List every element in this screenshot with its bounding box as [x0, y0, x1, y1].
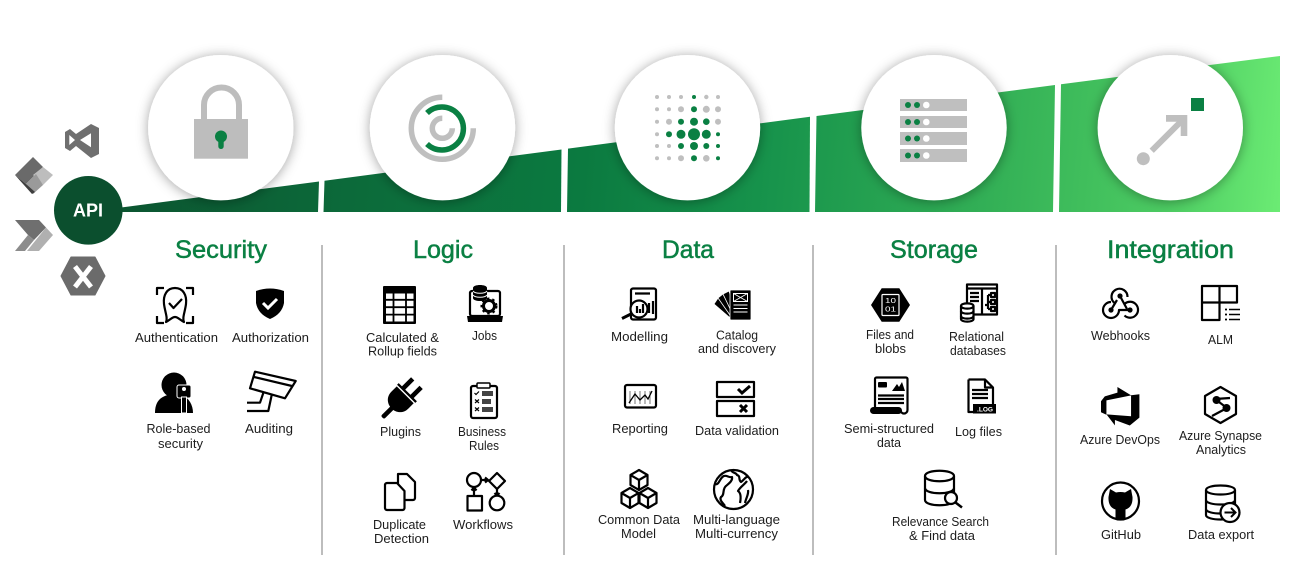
item: role-based security: security: [158, 436, 203, 451]
item: workflows: Workflows: [453, 517, 513, 532]
panel: storage: [844, 236, 1006, 543]
item: common data model: Model: [621, 526, 656, 541]
item: relational databases: [949, 284, 1006, 358]
item: files and blobs: 01: [885, 304, 896, 314]
item: business rules: Business: [458, 424, 506, 439]
item: auditing: [245, 372, 296, 436]
circle: data dots: [615, 55, 760, 200]
heading: logic: Logic: [413, 236, 473, 264]
item: duplicate detection: Detection: [374, 531, 429, 546]
item: relational databases: databases: [950, 343, 1006, 358]
item: azure synapse analytics: Azure Synapse: [1179, 428, 1262, 443]
item: auditing: Auditing: [245, 421, 293, 436]
item: calculated and rollup fields: [366, 286, 439, 358]
item: data export: [1188, 486, 1254, 542]
icon: Visual Studio: [65, 124, 99, 158]
icon: Xamarin: [61, 257, 105, 295]
icon: Power Apps: [15, 157, 53, 194]
item: role-based security: Role-based: [146, 421, 210, 436]
item: plugins: Plugins: [380, 424, 421, 439]
item: multi-language multi-currency: Multi-language: [693, 512, 780, 527]
item: azure devops: [1080, 387, 1160, 447]
heading: integration: Integration: [1107, 236, 1234, 264]
item: relevance search and find data: & Find data: [909, 528, 976, 543]
circle: security lock: [148, 55, 294, 200]
item: azure synapse analytics: Analytics: [1196, 442, 1246, 457]
item: ALM: [1202, 286, 1240, 347]
item: webhooks: [1091, 289, 1150, 343]
item: workflows: [453, 473, 513, 532]
item: github: [1101, 482, 1141, 542]
item: github: GitHub: [1101, 527, 1141, 542]
item: webhooks: Webhooks: [1091, 328, 1150, 343]
item: authentication: [135, 288, 218, 345]
item: business rules: [458, 383, 506, 453]
circle: integration arrow: [1098, 55, 1243, 200]
item: azure synapse analytics: [1179, 387, 1262, 457]
heading: storage: Storage: [890, 236, 978, 264]
growth wedge: [118, 56, 1280, 212]
item: jobs: Jobs: [472, 328, 497, 343]
item: data validation: Data validation: [695, 423, 779, 438]
item: data validation: [695, 382, 779, 438]
item: calculated and rollup fields: Rollup fields: [368, 344, 437, 358]
item: business rules: Rules: [469, 438, 499, 453]
item: common data model: [598, 470, 681, 541]
panel: integration: [1080, 236, 1262, 542]
item: multi-language multi-currency: [693, 470, 780, 541]
item: semi-structured data: [844, 378, 934, 450]
panel: data: [598, 236, 780, 541]
item: files and blobs: 10: [885, 296, 896, 305]
panel: logic: [366, 236, 513, 546]
item: relational databases: Relational: [949, 329, 1004, 344]
panel: security: [135, 236, 309, 451]
item: reporting: [612, 385, 668, 436]
item: catalog and discovery: Catalog: [716, 328, 758, 342]
icon: Power Automate: [15, 220, 53, 251]
item: files and blobs: [866, 288, 914, 356]
item: modelling: [611, 288, 668, 344]
item: ALM: ALM: [1208, 332, 1233, 347]
item: duplicate detection: [373, 474, 429, 546]
item: authentication: Authentication: [135, 330, 218, 345]
item: calculated and rollup fields: Calculated &: [366, 330, 439, 345]
API hub: API: [73, 200, 103, 220]
API hub: [54, 176, 123, 245]
item: multi-language multi-currency: Multi-currency: [695, 526, 779, 541]
item: azure devops: Azure DevOps: [1080, 432, 1160, 447]
heading: security: Security: [175, 236, 268, 264]
circle: storage servers: [861, 55, 1007, 200]
item: log files: .LOG: [977, 406, 993, 414]
item: semi-structured data: Semi-structured: [844, 421, 934, 436]
item: common data model: Common Data: [598, 512, 681, 527]
item: files and blobs: Files and: [866, 327, 914, 342]
item: files and blobs: blobs: [875, 341, 906, 356]
item: role-based security: [146, 372, 210, 451]
item: relevance search and find data: [892, 471, 989, 543]
item: modelling: Modelling: [611, 329, 668, 344]
item: duplicate detection: Duplicate: [373, 517, 426, 532]
item: authorization: [232, 288, 309, 345]
item: plugins: [373, 374, 426, 439]
item: relevance search and find data: Relevance Search: [892, 514, 989, 529]
item: log files: [955, 380, 1002, 439]
item: reporting: Reporting: [612, 421, 668, 436]
item: catalog and discovery: [698, 290, 776, 356]
heading: data: Data: [662, 236, 714, 264]
item: data export: Data export: [1188, 527, 1254, 542]
item: jobs: [467, 285, 503, 343]
dividers: [322, 245, 1056, 555]
item: log files: Log files: [955, 424, 1002, 439]
circle: logic rings: [370, 55, 515, 200]
item: authorization: Authorization: [232, 330, 309, 345]
item: catalog and discovery: and discovery: [698, 341, 776, 356]
item: semi-structured data: data: [877, 435, 902, 450]
